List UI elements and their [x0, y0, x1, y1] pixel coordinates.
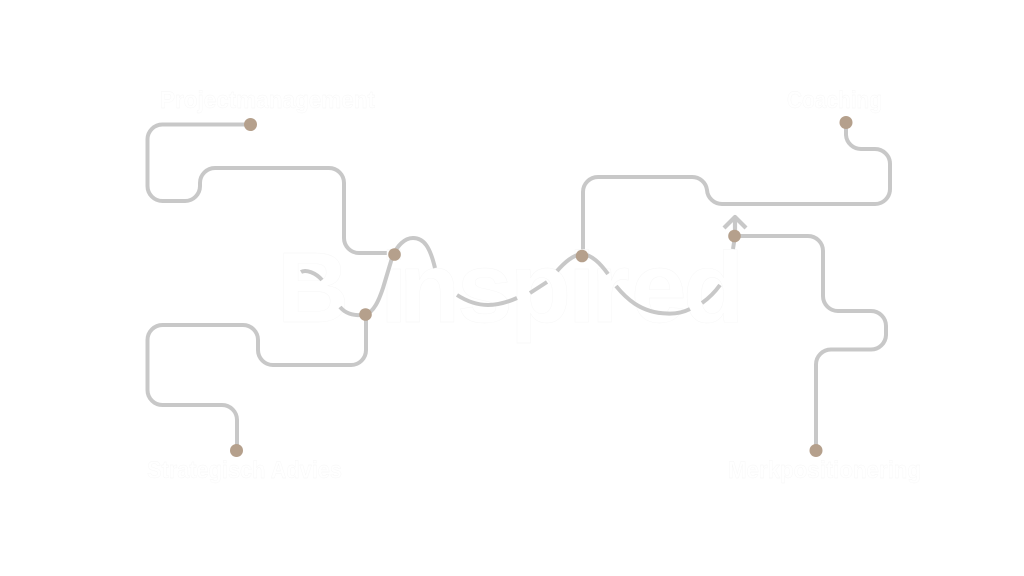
label: project management: Projectmanagement	[160, 87, 375, 114]
label: brand positioning: Merkpositionering	[728, 457, 921, 484]
label: coaching: Coaching	[787, 87, 882, 114]
wave line through logo	[301, 236, 735, 315]
node: junction upper left	[388, 248, 401, 261]
logo wordmark: Binspired	[277, 232, 744, 344]
node: strategic advice	[230, 444, 243, 457]
node: junction centre	[576, 250, 588, 262]
connector: strategic advice	[147, 315, 366, 451]
connector: coaching	[583, 122, 890, 256]
node: junction lower left	[359, 308, 372, 321]
label: strategic advice: Strategisch Advies	[147, 457, 342, 484]
connector: brand positioning	[734, 236, 886, 451]
arrow head	[724, 217, 746, 236]
node: brand positioning	[810, 444, 822, 457]
node: coaching	[840, 116, 852, 129]
node: project management	[244, 118, 257, 131]
connector: project management	[147, 124, 394, 253]
node: junction right	[728, 230, 741, 242]
